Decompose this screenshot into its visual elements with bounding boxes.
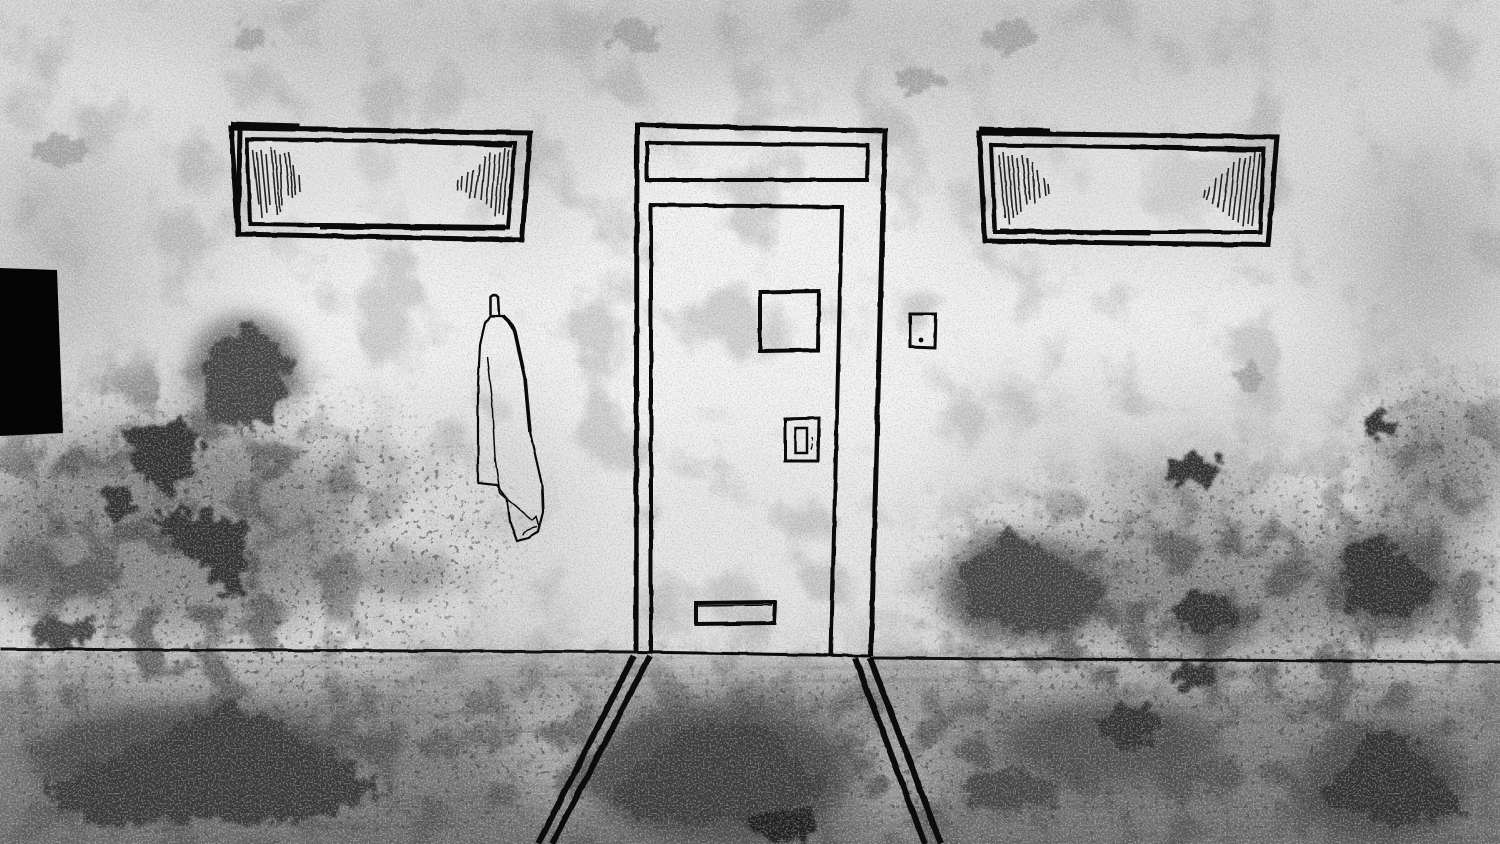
window glass xyxy=(995,147,1262,230)
hook xyxy=(490,295,499,315)
door xyxy=(636,125,885,656)
rough dark blotches xyxy=(30,320,1470,841)
window frame xyxy=(231,128,530,240)
window frame xyxy=(979,133,1277,245)
letter slot xyxy=(696,602,775,624)
window hatching left xyxy=(253,147,300,218)
window hatching left xyxy=(999,152,1049,224)
door window xyxy=(760,291,819,351)
black shape at left edge xyxy=(0,268,63,436)
left window xyxy=(231,125,530,240)
light switch xyxy=(910,314,936,348)
pale upper wall blotches xyxy=(32,21,1264,392)
speckle texture xyxy=(0,354,1500,844)
floor threshold lines xyxy=(538,656,941,844)
floor wood grain xyxy=(0,655,1500,844)
light patches on wall xyxy=(0,50,1320,640)
right window xyxy=(979,130,1277,245)
lower wall mottling xyxy=(0,334,1500,844)
door leaf xyxy=(651,205,842,654)
pale floor strips xyxy=(400,660,945,830)
towel fold lines xyxy=(487,357,539,535)
window glass xyxy=(249,141,514,226)
soft dark stains xyxy=(0,315,1470,844)
lower wall tonal shading xyxy=(0,395,1500,650)
window hatching right xyxy=(1204,152,1260,226)
hanging towel on hook xyxy=(478,295,543,541)
floor shading xyxy=(0,652,1500,844)
towel outline xyxy=(478,316,543,541)
upper wall tonal shading xyxy=(0,0,1500,360)
towel thick right edge xyxy=(503,316,530,432)
baseboard line xyxy=(0,649,1500,662)
door frame xyxy=(636,125,885,656)
transom panel xyxy=(647,143,868,180)
window hatching right xyxy=(457,148,509,216)
door handle plate xyxy=(785,418,819,461)
door threshold xyxy=(636,652,871,656)
